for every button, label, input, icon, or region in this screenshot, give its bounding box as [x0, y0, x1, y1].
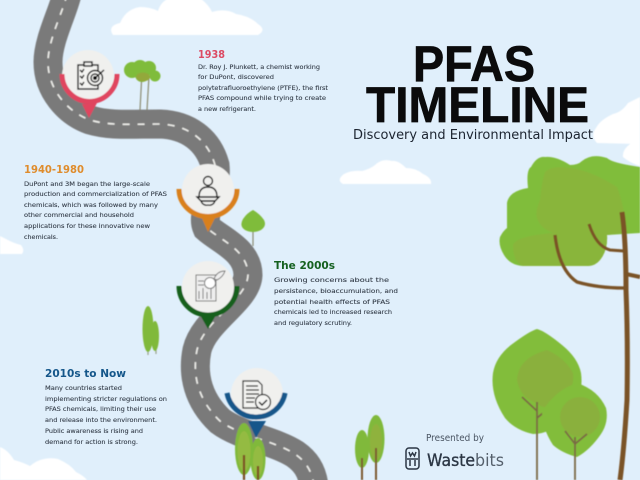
text block: The 2000s: potential health effects of PFAS — [274, 298, 390, 306]
milestone 4: 2010s marker — [227, 368, 285, 438]
text block: 2010s to Now — [45, 367, 167, 446]
title: TIMELINE — [366, 77, 589, 133]
text block: 2010s to Now: and release into the environment. — [45, 416, 157, 424]
icon: person with gear — [197, 176, 219, 205]
text block: 2010s to Now: 2010s to Now — [45, 367, 126, 380]
text block: The 2000s: Growing concerns about the — [274, 276, 389, 284]
text block: 1940-1980: chemicals, which was followed by many — [24, 201, 158, 209]
text block: 2010s to Now: PFAS chemicals, limiting their use — [45, 405, 156, 413]
cloud: middle — [340, 160, 431, 184]
text block: 1940-1980: applications for these innovative new — [24, 222, 150, 230]
small tree near 1938 — [124, 60, 160, 110]
milestone 1: 1938 marker — [62, 50, 117, 118]
title — [366, 36, 589, 133]
large tree: right — [500, 156, 640, 480]
icon: clipboard target — [78, 62, 104, 89]
road centre dashes — [48, 0, 314, 480]
text block: 1938: for DuPont, discovered — [198, 73, 274, 81]
cloud: top — [111, 0, 263, 35]
text block: 1940-1980: 1940-1980 — [24, 164, 84, 176]
icon: document with check — [243, 381, 270, 410]
cloud: right — [593, 97, 640, 166]
cloud: left small — [0, 236, 23, 254]
small trees left — [142, 306, 159, 355]
text block: 1938: polytetrafluoroethylene (PTFE), the first — [198, 84, 328, 92]
text block: The 2000s — [274, 259, 398, 327]
trees near logo — [355, 415, 384, 480]
text block: 2010s to Now: Public awareness is rising and — [45, 427, 143, 435]
trees in front of road — [235, 423, 266, 480]
text block: 2010s to Now: demand for action is strong. — [45, 438, 138, 446]
text block: 1938 — [198, 49, 328, 113]
milestone 2: 1940-1980 marker — [179, 164, 237, 232]
presented by label: Presented by — [426, 433, 484, 444]
text block: 1940-1980: production and commercialization of PFAS — [24, 190, 167, 198]
text block: 1938: Dr. Roy J. Plunkett, a chemist working — [198, 63, 320, 71]
text block: 1938: 1938 — [198, 49, 225, 61]
tree bottom right: small round — [542, 383, 607, 480]
text block: 1938: a new refrigerant. — [198, 105, 256, 113]
logo: Wastebits — [406, 448, 504, 471]
milestone 3: 2000s marker — [179, 261, 237, 329]
icon: Wastebits bin — [406, 448, 419, 469]
text block: The 2000s: The 2000s — [274, 259, 335, 272]
text block: 1940-1980: other commercial and household — [24, 211, 134, 219]
icon: report with leaf — [196, 271, 225, 301]
logo: Wastebits: bits — [475, 451, 504, 471]
subtitle: Discovery and Environmental Impact — [353, 128, 593, 143]
title: PFAS — [413, 36, 535, 92]
text block: 1940-1980 — [24, 164, 167, 241]
logo: Wastebits: Waste — [427, 451, 475, 471]
text block: 2010s to Now: Many countries started — [45, 384, 122, 392]
text block: The 2000s: and regulatory scrutiny. — [274, 319, 352, 327]
tree bottom right: large round — [492, 329, 582, 480]
text block: 1940-1980: DuPont and 3M began the large-scale — [24, 180, 150, 188]
cloud: bottom left — [0, 447, 87, 480]
text block: 1938: PFAS compound while trying to create — [198, 94, 326, 102]
trunk and branches — [555, 212, 640, 480]
text block: 1940-1980: chemicals. — [24, 233, 58, 241]
text block: The 2000s: chemicals led to increased research — [274, 308, 392, 316]
text block: The 2000s: persistence, bioaccumulation, and — [274, 287, 398, 295]
text block: 2010s to Now: implementing stricter regulations on — [45, 395, 167, 403]
road — [48, 0, 314, 480]
small tree near 1940-1980 — [241, 210, 265, 246]
